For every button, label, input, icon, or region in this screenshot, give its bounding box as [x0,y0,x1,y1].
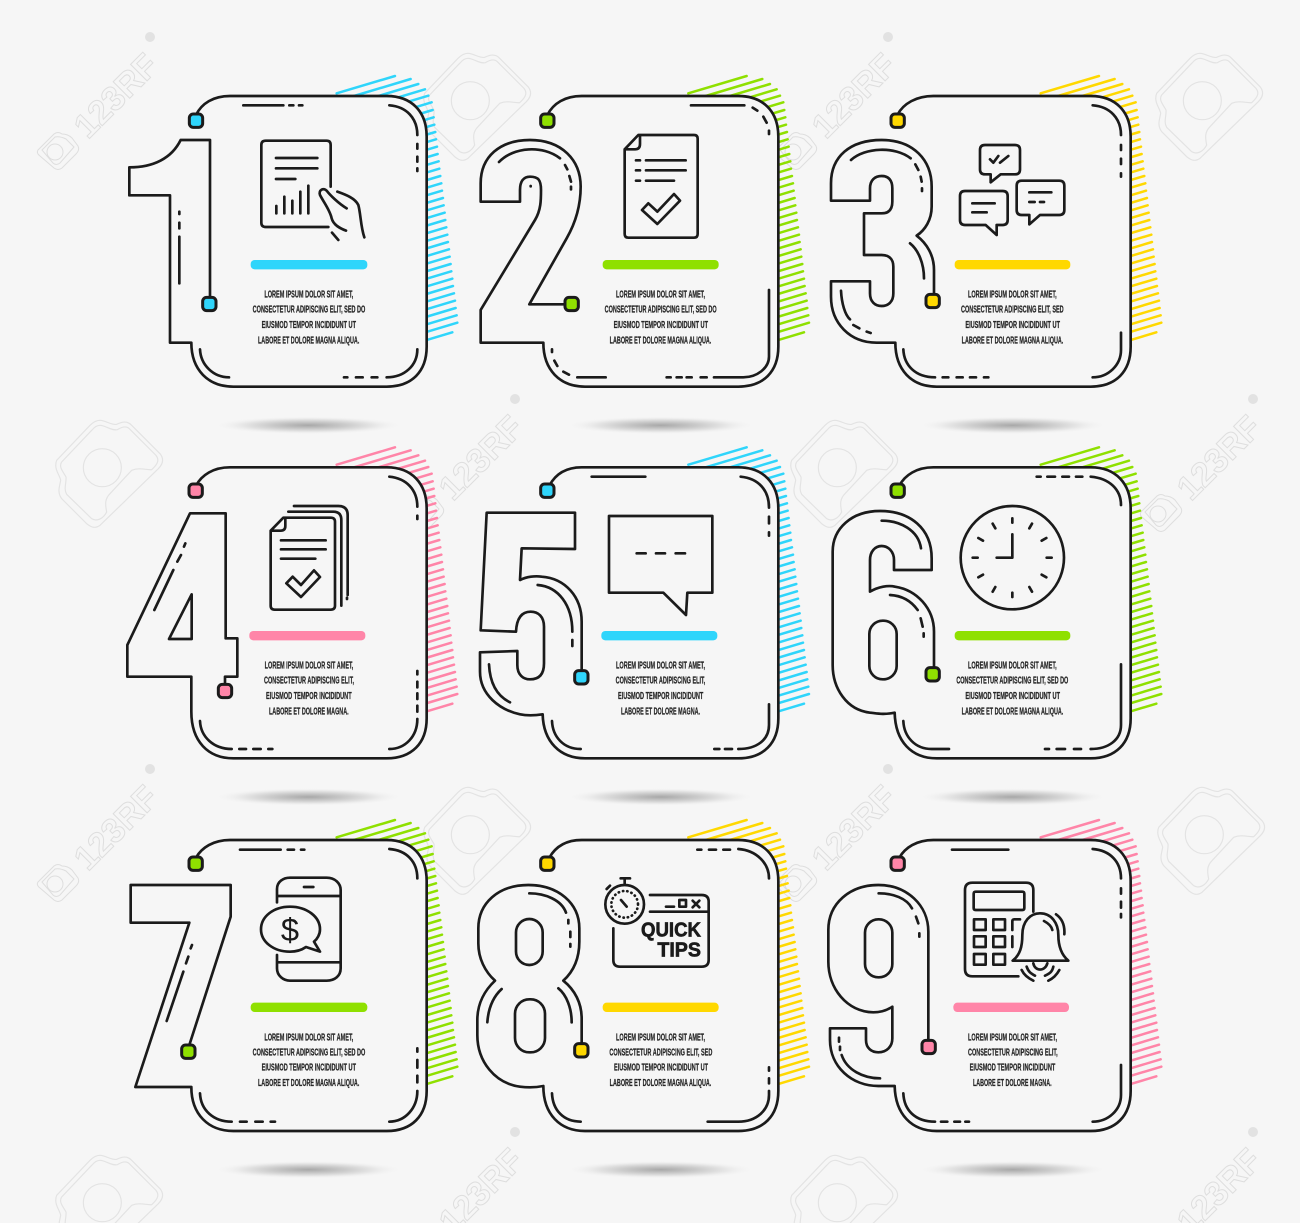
stripes [688,76,809,343]
text block: CONSECTETUR ADIPISCING ELIT, SED DO [253,1047,366,1058]
colour bar [251,1003,367,1012]
numeral 9 and frame [828,840,1131,1131]
text block: LABORE ET DOLORE MAGNA ALIQUA. [610,335,712,346]
connector node bottom [203,297,216,311]
watermarks: 123RF [67,47,166,146]
shadow [918,416,1108,434]
text block: LABORE ET DOLORE MAGNA. [973,1078,1052,1089]
watermarks: 123RF [1170,409,1269,508]
numeral counter [869,621,897,679]
text block: EIUSMOD TEMPOR INCIDIDUNT UT [614,1063,708,1074]
text block: LABORE ET DOLORE MAGNA ALIQUA. [962,706,1064,717]
text block: LOREM IPSUM DOLOR SIT AMET, [968,661,1057,672]
watermarks: 123RF [432,409,531,508]
text block: LOREM IPSUM DOLOR SIT AMET, [264,290,354,301]
text block: LABORE ET DOLORE MAGNA. [621,706,700,717]
colour bar [953,1003,1069,1012]
icon: quick tips window with stopwatch: QUICK [641,919,701,942]
text block: LABORE ET DOLORE MAGNA. [269,706,349,717]
text block: LABORE ET DOLORE MAGNA ALIQUA. [258,335,360,346]
colour bar [603,260,719,269]
text block: LABORE ET DOLORE MAGNA ALIQUA. [962,335,1064,346]
connector node bottom [182,1045,195,1058]
colour bar [251,260,367,269]
panel: step 9 [828,820,1161,1179]
text block: LOREM IPSUM DOLOR SIT AMET, [968,1032,1057,1043]
text block [605,290,717,346]
text block: LOREM IPSUM DOLOR SIT AMET, [616,661,705,672]
numeral 6 and frame [833,467,1131,758]
connector node top [189,114,203,127]
text block: EIUSMOD TEMPOR INCIDIDUNT [266,691,352,702]
text block: EIUSMOD TEMPOR INCIDIDUNT UT [965,691,1060,702]
panel: step 3 [831,76,1161,434]
inner dashes [179,105,417,377]
text block [961,290,1064,346]
connector node top [541,484,554,497]
numeral 1 and frame [129,96,427,387]
shadow [918,1161,1108,1179]
text block: LOREM IPSUM DOLOR SIT AMET, [616,1032,705,1043]
watermarks: 123RF [805,47,904,146]
connector node bottom [218,684,232,698]
stripes [337,447,457,714]
stripes [1041,76,1161,343]
connector node top [891,484,904,497]
inner dashes [154,477,417,749]
text block: CONSECTETUR ADIPISCING ELIT, SED DO [253,305,366,316]
icon: phone with payment bubble [261,878,341,981]
text block: LABORE ET DOLORE MAGNA ALIQUA. [258,1078,360,1089]
inner dashes [841,105,1121,377]
stripes [1041,820,1161,1087]
numeral 5 and frame [480,467,778,758]
colour bar [249,631,365,640]
connector node bottom [565,297,578,311]
text block: CONSECTETUR ADIPISCING ELIT, SED DO [605,305,717,316]
shadow [918,788,1108,806]
panel: step 2 [481,76,809,434]
text block: LABORE ET DOLORE MAGNA ALIQUA. [610,1078,712,1089]
icon: stacked checked documents [271,506,348,610]
panel: step 4 [127,447,457,806]
text block [253,1032,366,1089]
inner dashes [489,477,769,749]
stripes [688,447,809,714]
text block: EIUSMOD TEMPOR INCIDIDUNT UT [262,320,356,331]
text block: EIUSMOD TEMPOR INCIDIDUNT UT [262,1063,356,1074]
text block: CONSECTETUR ADIPISCING ELIT, SED DO [956,676,1069,687]
shadow [566,788,756,806]
inner dashes [499,105,769,377]
stripes [1041,447,1161,714]
text block: CONSECTETUR ADIPISCING ELIT, [968,1047,1058,1058]
text block: LOREM IPSUM DOLOR SIT AMET, [264,1032,354,1043]
text block [968,1032,1058,1089]
text block: EIUSMOD TEMPOR INCIDIDUNT UT [614,320,708,331]
connector node top [541,114,554,127]
shadow [213,416,403,434]
shadow [566,1161,756,1179]
stripes [337,820,457,1087]
connector node bottom [926,668,939,681]
shadow [566,416,756,434]
watermarks: 123RF [67,779,166,878]
connector node bottom [926,294,939,308]
text block [616,661,706,717]
text block [264,661,354,717]
inner dashes [487,849,769,1122]
inner dashes [882,477,1121,749]
inner dashes [839,849,1121,1122]
icon: checked document [625,135,698,238]
numeral 2 and frame [481,96,778,387]
connector node bottom [575,1044,588,1057]
connector node bottom [575,671,588,684]
text block: CONSECTETUR ADIPISCING ELIT, [616,676,706,687]
numeral counter [865,919,892,977]
numeral 8 and frame [477,840,778,1131]
icon: quick tips window with stopwatch: TIPS [657,939,701,962]
text block: CONSECTETUR ADIPISCING ELIT, SED [961,305,1064,316]
shadow [213,788,403,806]
icon: speech bubble [609,516,712,615]
text block: EIUSMOD TEMPOR INCIDIDUNT [970,1063,1055,1074]
colour bar [603,1003,719,1012]
text block: LOREM IPSUM DOLOR SIT AMET, [616,290,705,301]
icon: report in hand [261,141,364,240]
watermarks: 123RF [805,779,904,878]
icon: calculator with bell [965,883,1068,981]
text block: LOREM IPSUM DOLOR SIT AMET, [265,661,354,672]
text block: EIUSMOD TEMPOR INCIDIDUNT [618,691,703,702]
numeral counter [169,594,192,639]
icon: quick tips window with stopwatch [605,878,709,967]
icon: clock [961,506,1064,609]
numeral 4 and frame [127,467,427,758]
inner dashes [167,849,417,1122]
text block: CONSECTETUR ADIPISCING ELIT, [264,676,354,687]
icon: chat bubbles [960,145,1064,235]
connector node bottom [922,1040,935,1054]
panel: step 1 [129,76,457,434]
icon: phone with payment bubble: $ [281,911,299,948]
connector node top [189,484,202,497]
connector node top [891,114,904,127]
text block [253,290,366,346]
numeral 7 and frame [131,840,427,1131]
text block: CONSECTETUR ADIPISCING ELIT, SED [609,1047,712,1058]
colour bar [955,260,1070,269]
numeral counters [515,919,545,1052]
text block: EIUSMOD TEMPOR INCIDIDUNT UT [965,320,1060,331]
colour bar [601,631,717,640]
panel: step 8 [477,820,809,1179]
text block [609,1032,712,1089]
stripes [688,820,809,1087]
panel: step 7 [131,820,457,1179]
connector node top [189,857,202,870]
stripes [337,76,457,343]
panel: step 5 [480,447,809,806]
numeral 3 and frame [831,96,1131,387]
connector node top [891,857,904,870]
colour bar [955,631,1070,640]
panel: step 6 [833,447,1161,806]
text block [956,661,1069,717]
text block: LOREM IPSUM DOLOR SIT AMET, [968,290,1057,301]
connector node top [541,857,554,870]
shadow [213,1161,403,1179]
